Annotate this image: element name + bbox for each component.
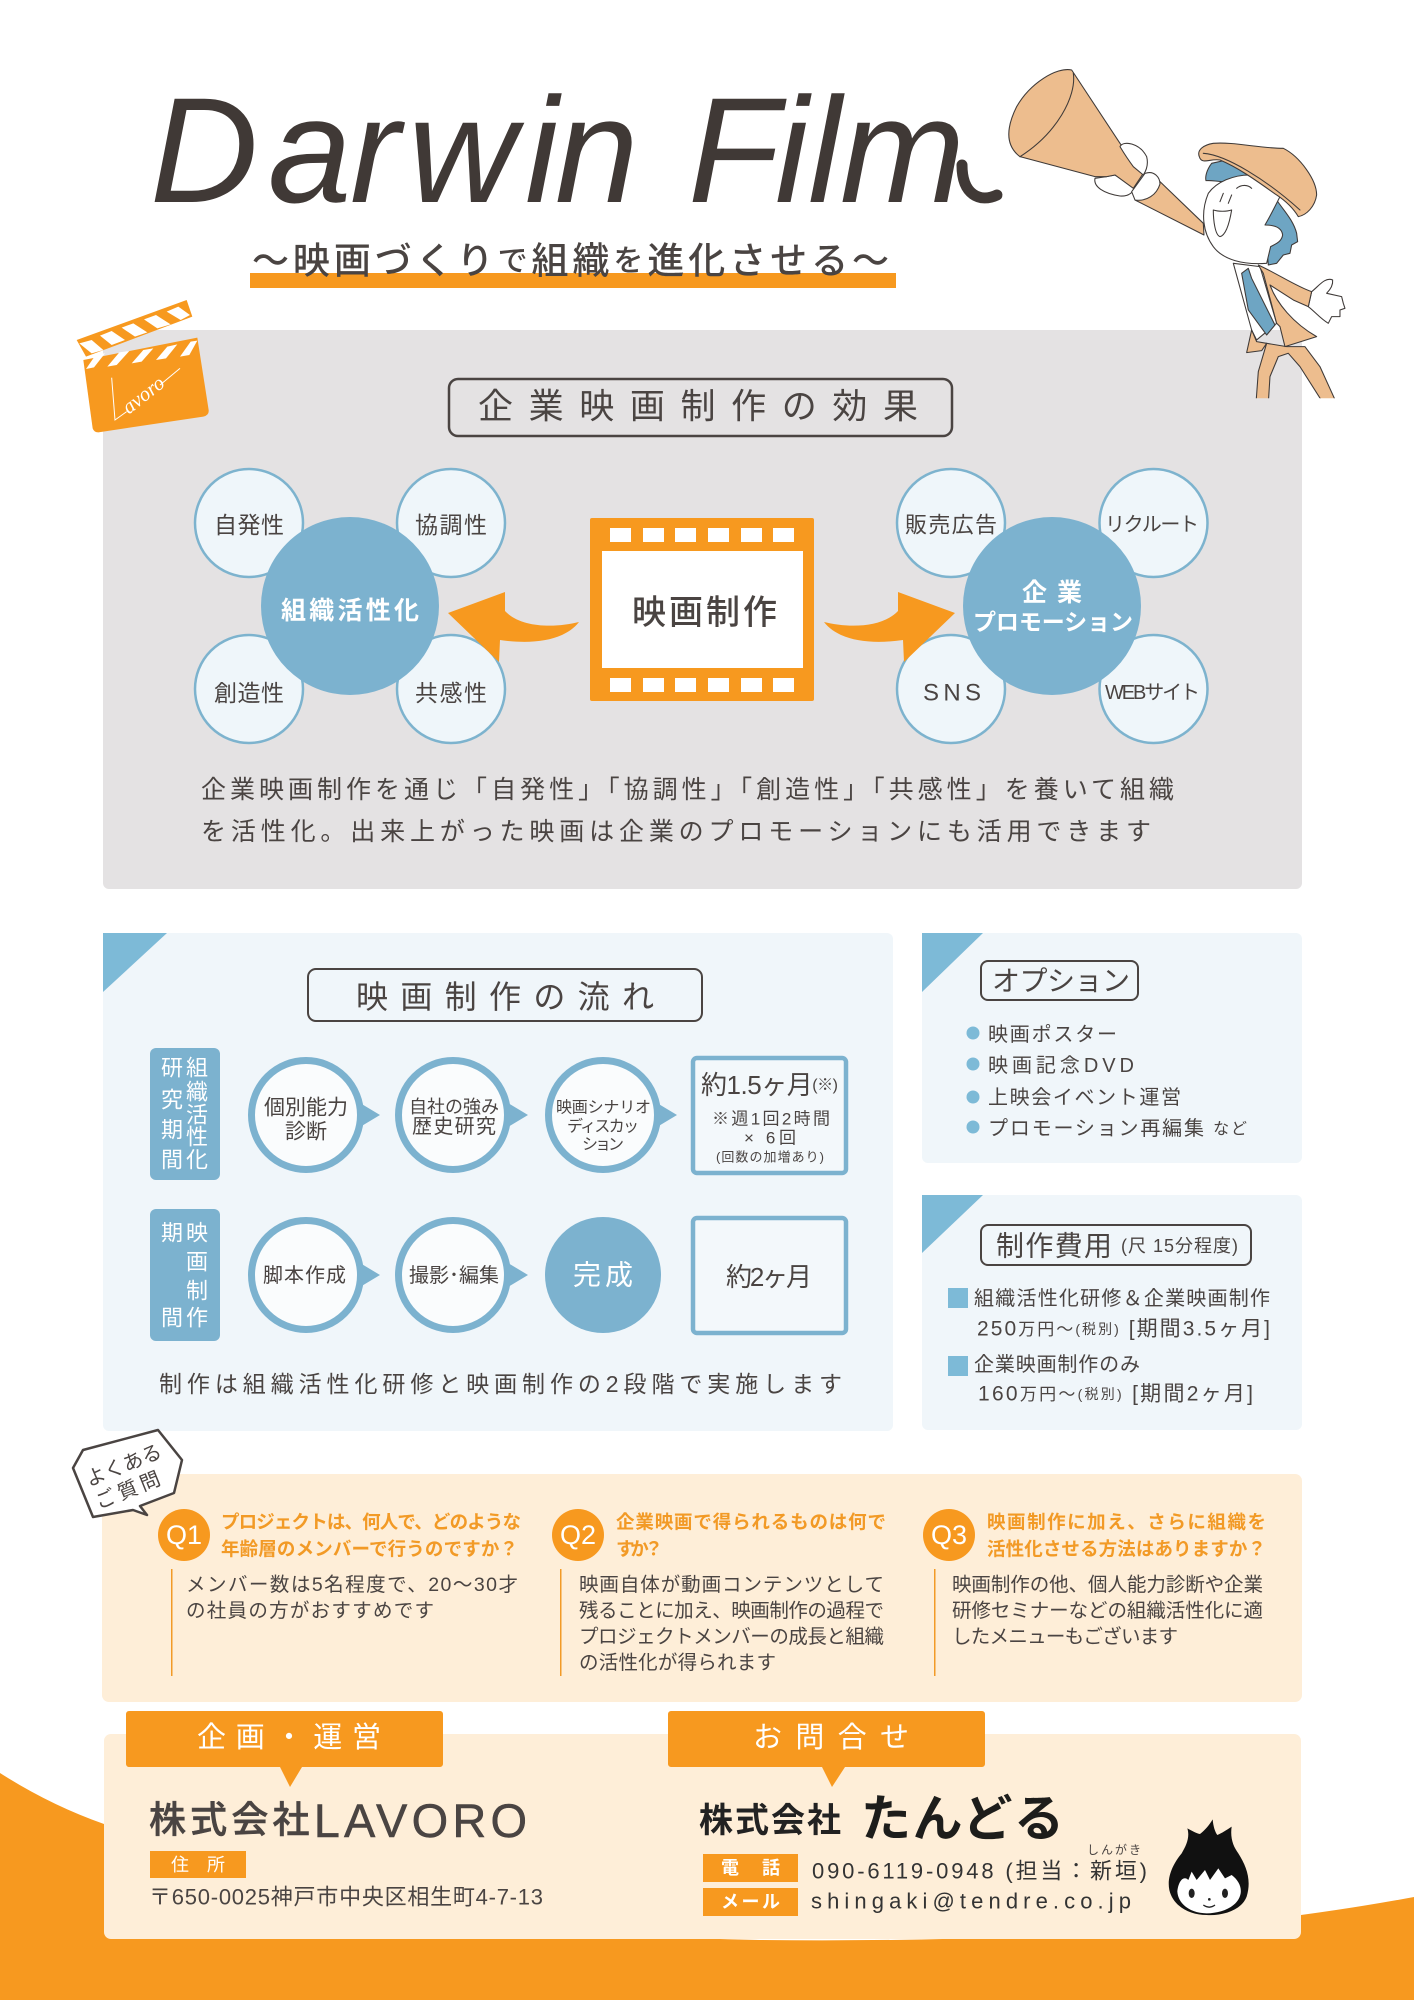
flow row 1: 約1.5ヶ月(※) xyxy=(701,1070,838,1100)
company: Tendre: しんがき xyxy=(1087,1842,1141,1857)
heading: effects: 企業映画制作の効果 xyxy=(478,388,918,426)
company: LAVORO: 住所 xyxy=(171,1855,225,1875)
cost items: 組織活性化研修＆企業映画制作 xyxy=(974,1287,1270,1310)
heading: cost: 制作費用 xyxy=(996,1230,1112,1262)
arrow: to organisation xyxy=(448,592,579,662)
heading: options xyxy=(981,961,1138,1000)
diagram: organisation activation: 協調性 xyxy=(415,512,487,538)
question 3: 研修セミナーなどの組織活性化に適 xyxy=(952,1600,1263,1622)
tab: contact xyxy=(668,1711,985,1787)
heading: options: オプション xyxy=(992,966,1130,996)
question 1: の社員の方がおすすめです xyxy=(186,1600,434,1622)
diagram: organisation activation: 組織活性化 xyxy=(281,597,419,625)
flow row 2: 完成 xyxy=(573,1260,633,1290)
question 2: プロジェクトメンバーの成長と組織 xyxy=(579,1626,884,1648)
company: LAVORO: 株式会社LAVORO xyxy=(149,1794,527,1846)
question 1: Q1 xyxy=(166,1520,202,1550)
company: Tendre: 090-6119-0948 (担当：新垣) xyxy=(812,1858,1147,1884)
FAQ bubble xyxy=(73,1430,182,1517)
panel: effects of corporate film production xyxy=(103,330,1302,889)
heading: cost: (尺 15分程度) xyxy=(1121,1236,1238,1256)
tab: planning and operation: 企画・運営 xyxy=(197,1721,381,1754)
flow row 1: (回数の加増あり) xyxy=(716,1150,824,1164)
question 3: 映画制作に加え、さらに組織を xyxy=(987,1512,1266,1532)
flow row 1: 自社の強み xyxy=(409,1097,499,1117)
diagram: organisation activation xyxy=(195,469,505,743)
tab: planning and operation xyxy=(126,1711,443,1787)
flow row 1: ※週1回2時間 xyxy=(712,1110,830,1128)
diagram: organisation activation: 共感性 xyxy=(415,680,487,706)
company: Tendre xyxy=(699,1791,1147,1916)
question 1: メンバー数は5名程度で、20～30才 xyxy=(186,1574,518,1596)
options list: 映画記念DVD xyxy=(988,1054,1134,1077)
panel: company info xyxy=(104,1711,1301,1939)
diagram: corporate promotion: 企業 xyxy=(1022,579,1082,607)
question 2: の活性化が得られます xyxy=(579,1652,776,1674)
options list xyxy=(966,1023,1247,1140)
options list: 上映会イベント運営 xyxy=(988,1086,1181,1109)
question 3: 映画制作の他、個人能力診断や企業 xyxy=(952,1574,1263,1596)
label: research period xyxy=(150,1048,220,1180)
diagram: corporate promotion: プロモーション xyxy=(973,609,1133,635)
heading: cost xyxy=(981,1225,1251,1265)
flow row 1: 診断 xyxy=(285,1120,327,1144)
flow row 1: × 6回 xyxy=(744,1128,796,1148)
question 3: したメニューもございます xyxy=(952,1625,1178,1648)
diagram: organisation activation: 創造性 xyxy=(214,680,284,706)
question 2: Q2 xyxy=(560,1520,596,1550)
flow row 2: 撮影･編集 xyxy=(409,1264,499,1287)
cost items: 250万円～(税別) [期間3.5ヶ月] xyxy=(977,1318,1270,1340)
question 2: すか？ xyxy=(616,1538,663,1560)
panel: production flow xyxy=(103,933,893,1431)
subtitle: ～映画づくりで組織を進化させる～ xyxy=(252,240,889,282)
company: Tendre: たんどる xyxy=(861,1791,1064,1847)
icon: clapperboard: avoro xyxy=(118,372,169,419)
panel: production cost xyxy=(922,1195,1302,1430)
options list: プロモーション再編集 など xyxy=(988,1117,1247,1140)
title: Darwin Film xyxy=(150,66,965,234)
flow row 1: ション xyxy=(582,1136,624,1154)
diagram: corporate promotion: 販売広告 xyxy=(905,512,997,538)
question 2: 企業映画で得られるものは何で xyxy=(616,1512,886,1532)
diagram: corporate promotion xyxy=(897,469,1208,743)
flow row 1: 映画シナリオ xyxy=(556,1098,651,1116)
text: effects description xyxy=(201,776,1174,846)
question 1: 年齢層のメンバーで行うのですか？ xyxy=(221,1538,518,1560)
options list: 映画ポスター xyxy=(988,1023,1117,1046)
company: LAVORO: 〒650-0025神戸市中央区相生町4-7-13 xyxy=(149,1884,543,1910)
diagram: film strip xyxy=(590,518,814,701)
flow row 1: 歴史研究 xyxy=(412,1115,496,1138)
question 2: 残ることに加え、映画制作の過程で xyxy=(579,1600,884,1622)
flow row 2: 脚本作成 xyxy=(263,1264,346,1287)
FAQ bubble: ご質問 xyxy=(92,1467,164,1514)
arrow: to promotion xyxy=(824,592,955,662)
diagram: film strip: 映画制作 xyxy=(632,594,777,632)
flow row 2: 約2ヶ月 xyxy=(726,1262,812,1292)
diagram: corporate promotion: SNS xyxy=(923,680,981,706)
corner triangle xyxy=(922,1195,983,1253)
diagram: organisation activation: 自発性 xyxy=(214,512,284,538)
question 2: 映画自体が動画コンテンツとして xyxy=(579,1574,884,1596)
question 2 xyxy=(552,1509,886,1676)
orange background wave xyxy=(0,1773,1414,2000)
corner triangle xyxy=(922,933,983,992)
subtitle underline xyxy=(250,273,896,288)
illustration: man with megaphone xyxy=(1009,70,1345,403)
heading: production flow: 映画制作の流れ xyxy=(356,979,654,1015)
cost items xyxy=(948,1287,1270,1406)
company: Tendre: 株式会社 xyxy=(699,1802,841,1840)
company: LAVORO xyxy=(149,1794,543,1910)
question 3: 活性化させる方法はありますか？ xyxy=(987,1538,1266,1560)
icon: clapperboard xyxy=(77,300,209,432)
question 1 xyxy=(158,1509,521,1676)
text: effects description: 企業映画制作を通じ「自発性」「協調性」「創造性」「共感性」を養いて組織 xyxy=(201,776,1174,804)
label: research period: 組織活性化 xyxy=(186,1056,208,1172)
corner triangle xyxy=(103,933,167,992)
company: Tendre: メール xyxy=(721,1892,780,1912)
flow row 1: 個別能力 xyxy=(264,1096,348,1120)
label: film production period: 期間 xyxy=(161,1220,183,1330)
label: research period: 研究期間 xyxy=(161,1056,183,1172)
company: Tendre: 電話 xyxy=(721,1858,780,1878)
company: Tendre: shingaki@tendre.co.jp xyxy=(811,1888,1131,1914)
text: two-stage note: 制作は組織活性化研修と映画制作の2段階で実施します xyxy=(159,1371,842,1397)
panel: FAQ xyxy=(73,1430,1302,1702)
label: film production period xyxy=(150,1209,220,1341)
heading: effects xyxy=(449,379,952,436)
FAQ bubble: よくある xyxy=(83,1441,165,1491)
text: effects description: を活性化。出来上がった映画は企業のプロモーションにも活用できます xyxy=(201,818,1151,846)
diagram: corporate promotion: リクルート xyxy=(1105,513,1199,536)
cost items: 160万円～(税別) [期間2ヶ月] xyxy=(978,1382,1253,1406)
diagram: corporate promotion: WEBサイト xyxy=(1105,682,1200,704)
icon: mascot xyxy=(1169,1819,1249,1915)
heading: production flow xyxy=(308,969,702,1021)
label: film production period: 映画制作 xyxy=(186,1220,208,1330)
question 3: Q3 xyxy=(931,1520,967,1550)
tab: contact: お問合せ xyxy=(753,1721,909,1754)
flow row 2 xyxy=(252,1217,846,1333)
question 3 xyxy=(923,1509,1266,1676)
panel: options xyxy=(922,933,1302,1163)
cost items: 企業映画制作のみ xyxy=(974,1353,1140,1376)
flow row 1 xyxy=(252,1058,846,1173)
question 1: プロジェクトは、何人で、どのような xyxy=(221,1512,521,1532)
flow row 1: ディスカッ xyxy=(567,1116,639,1136)
